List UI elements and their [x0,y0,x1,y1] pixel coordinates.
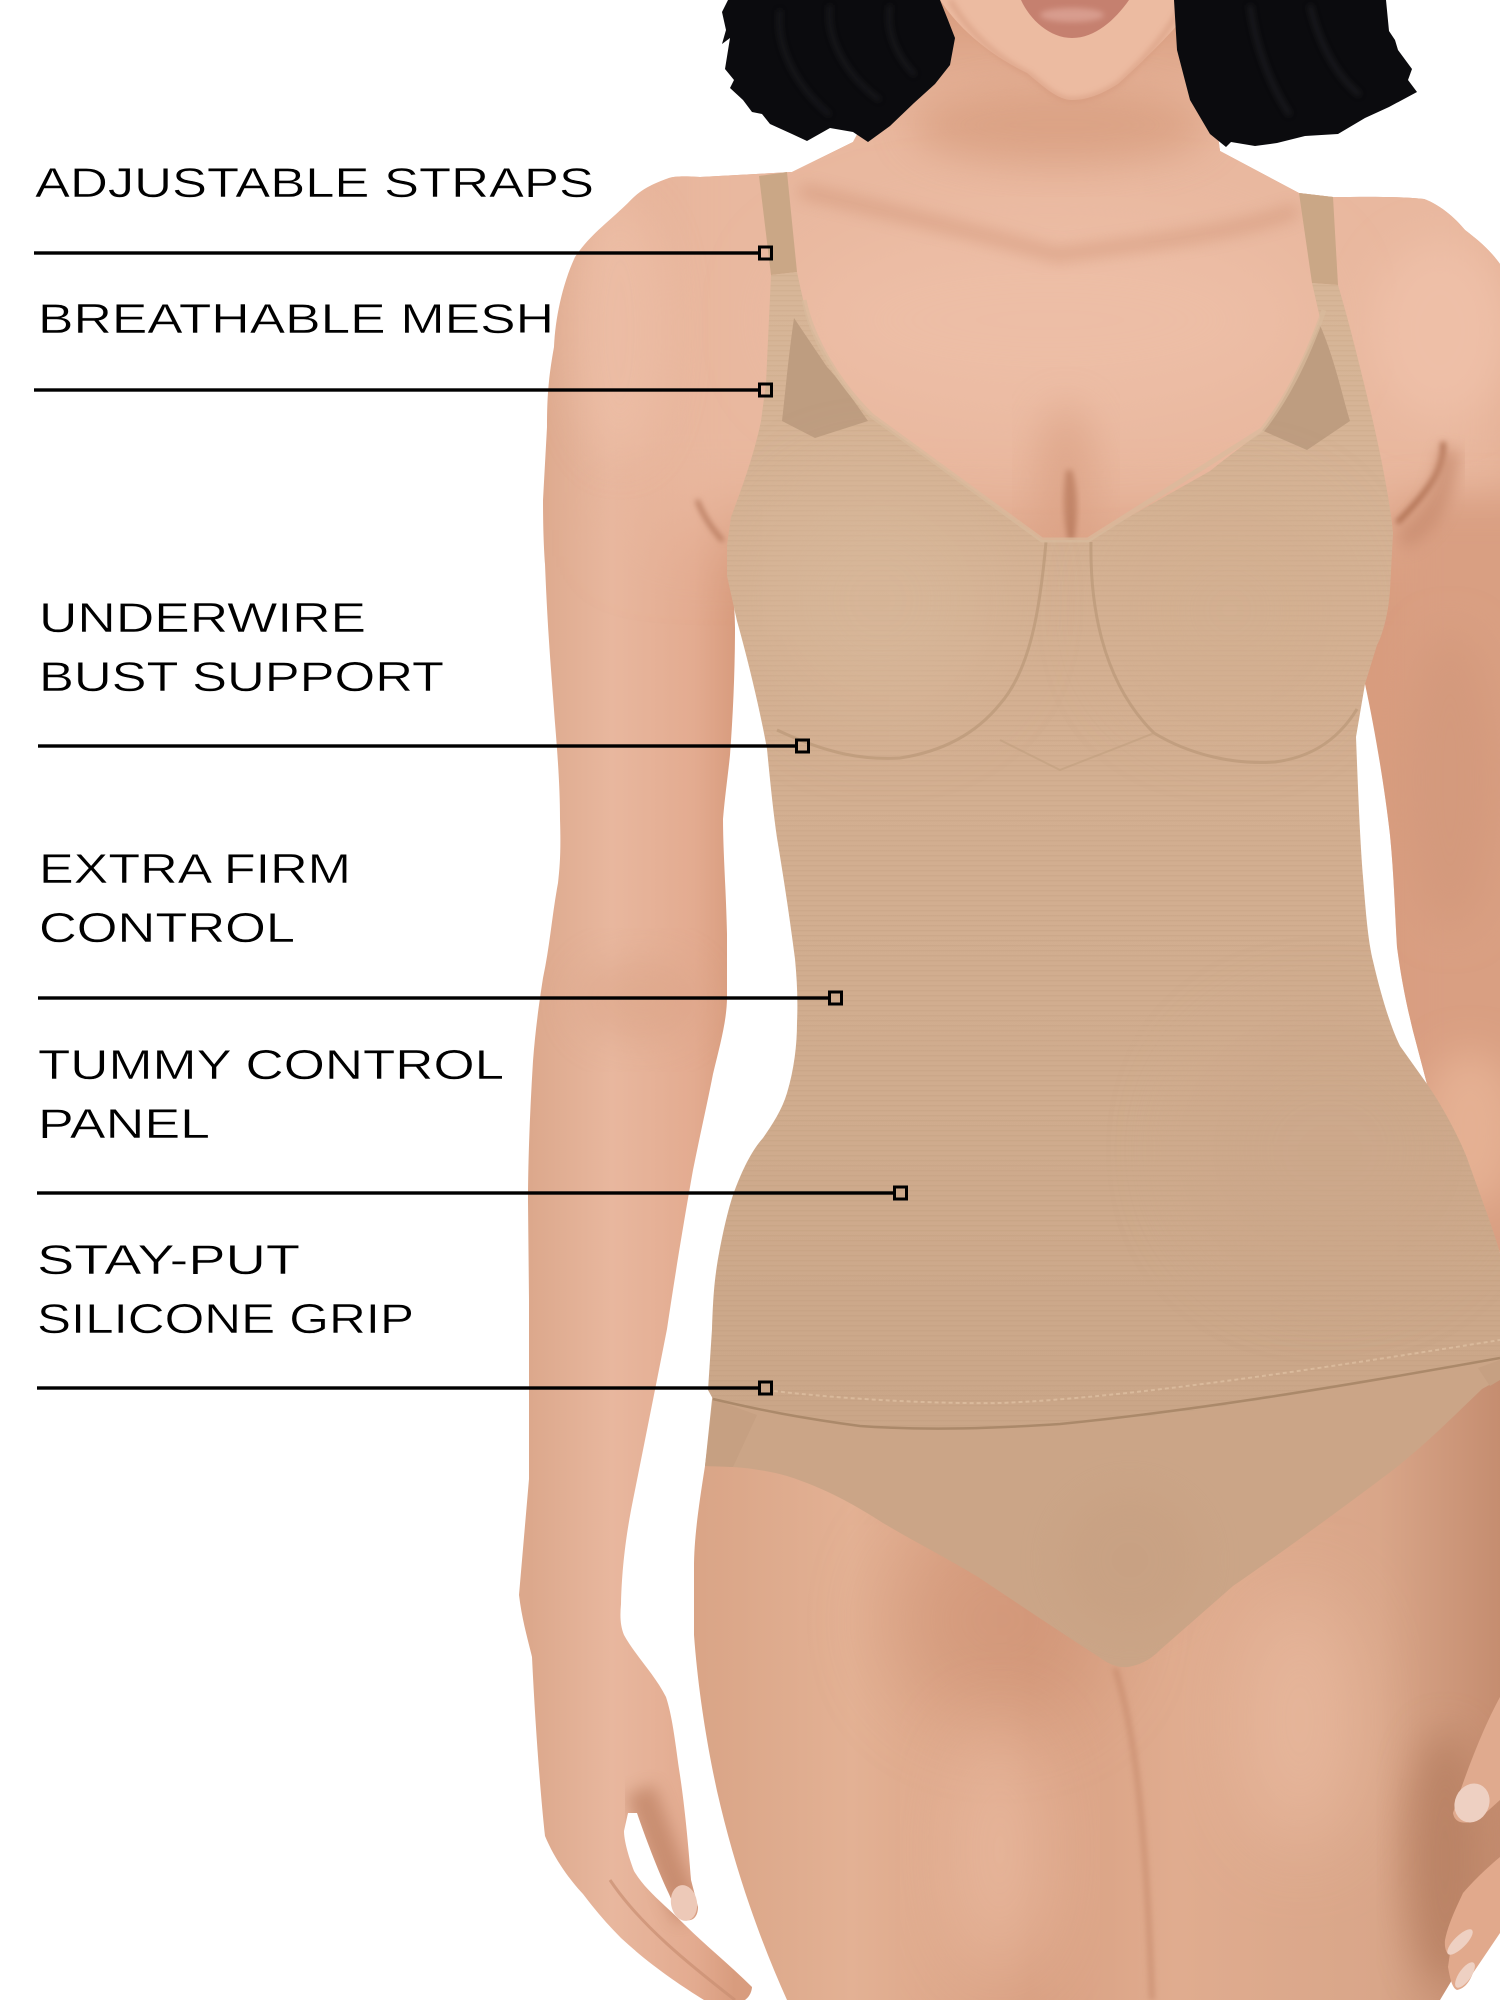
callout: stay-put silicone grip [37,1236,772,1394]
callout: extra firm control: EXTRA FIRM [39,845,351,892]
shoulder straps [759,172,1338,285]
left hand thumbnail [668,1883,700,1923]
shaping camisole [708,272,1500,1429]
callout: adjustable straps [34,159,772,259]
callout: extra firm control [38,845,842,1004]
lips [1021,0,1129,38]
callout: stay-put silicone grip: SILICONE GRIP [37,1295,414,1342]
face and chin [940,0,1197,100]
fingernails [1444,1778,1496,1991]
callout: breathable mesh [34,295,772,396]
thighs [694,1379,1500,2000]
mesh panels [782,318,1350,450]
hem stitch [774,1340,1500,1403]
cup seams [777,542,1357,770]
callout: tummy control panel: PANEL [38,1100,210,1147]
callout: underwire bust support: BUST SUPPORT [39,653,444,700]
callout: extra firm control: CONTROL [39,904,295,951]
model photo illustration [519,0,1500,2000]
callout: underwire bust support: UNDERWIRE [39,594,366,641]
callout: adjustable straps: ADJUSTABLE STRAPS [35,159,594,206]
callout: tummy control panel: TUMMY CONTROL [38,1041,504,1088]
callout: stay-put silicone grip: STAY-PUT [37,1236,300,1283]
hem shadow [713,1358,1500,1429]
upper body skin with arms [519,0,1500,2000]
right hand fingers [1444,1697,1500,1991]
left hair [722,0,955,142]
briefs [705,1340,1500,1667]
neckline binding [804,300,1324,540]
callout: underwire bust support [38,594,808,752]
right hair [1174,0,1417,147]
callout: tummy control panel [37,1041,906,1199]
callout: breathable mesh: BREATHABLE MESH [38,295,554,342]
